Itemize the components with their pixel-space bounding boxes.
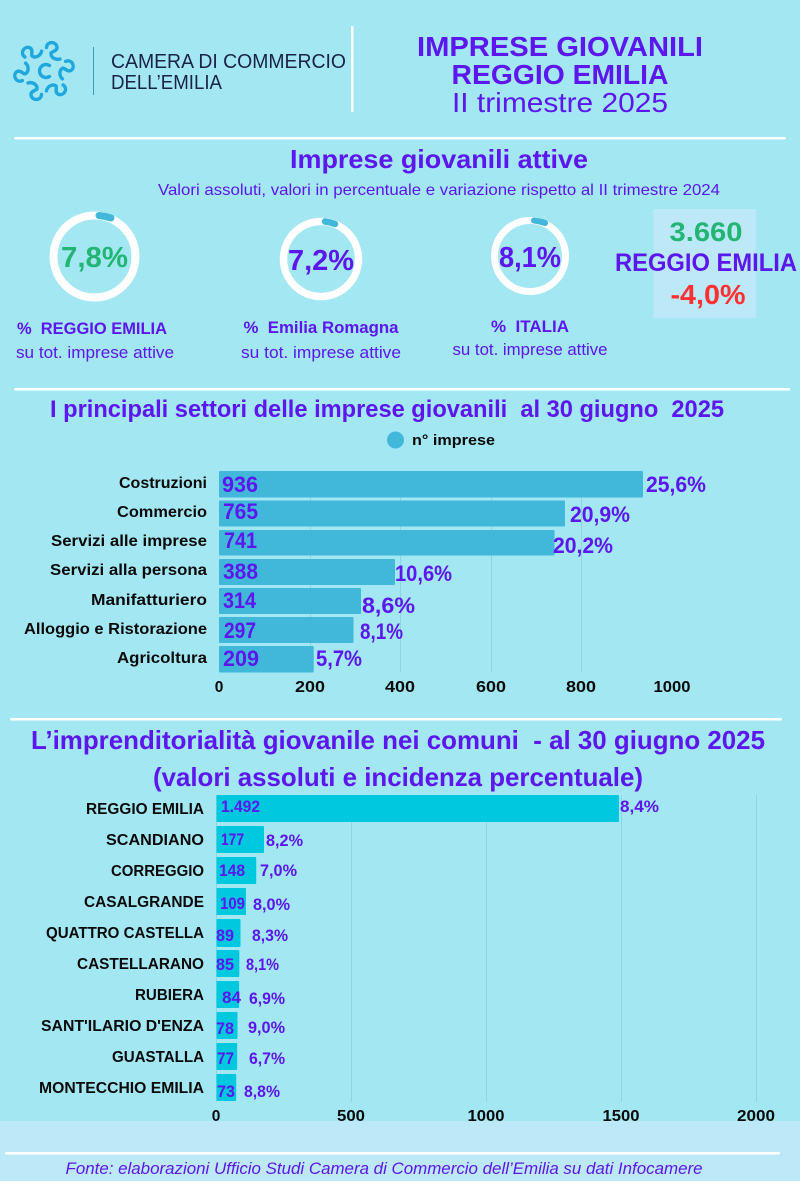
- percentages: 6,9%: [249, 989, 285, 1008]
- heading: imprenditorialità nei comuni: [31, 725, 765, 792]
- axis: 200: [295, 679, 325, 696]
- axis: [212, 1108, 775, 1125]
- heading: imprese giovanili attive: [158, 144, 720, 199]
- axis: 1000: [654, 679, 690, 696]
- callout: totale Reggio Emilia: [615, 209, 797, 318]
- callout: totale Reggio Emilia: -4,0%: [670, 279, 746, 310]
- values: 85: [216, 955, 234, 974]
- municipality labels: SANT'ILARIO D'ENZA: [41, 1018, 204, 1035]
- legend: n° imprese: [387, 432, 495, 449]
- title: REGGIO EMILIA: [452, 59, 668, 90]
- values: [216, 797, 260, 1101]
- municipality labels: RUBIERA: [135, 987, 204, 1004]
- percentages: 7,0%: [260, 861, 297, 880]
- heading: imprese giovanili attive: Valori assoluti, valori in percentuale e variazione rispetto al II trimestre 2024: [158, 182, 720, 199]
- axis: 2000: [737, 1108, 775, 1125]
- panel: kpi Emilia Romagna: su tot. imprese attive: [241, 344, 401, 362]
- axis: [215, 679, 690, 696]
- category labels: Servizi alla persona: [50, 562, 207, 579]
- municipality labels: QUATTRO CASTELLA: [46, 925, 204, 942]
- category labels: [24, 475, 207, 667]
- logo: Camera di Commercio dell'Emilia: CAMERA DI COMMERCIO: [111, 50, 346, 73]
- bar chart: comuni: [39, 795, 775, 1125]
- panel: kpi Reggio Emilia: 7,8%: [61, 242, 128, 274]
- values: 741: [224, 528, 257, 553]
- panel: kpi Emilia Romagna: [241, 222, 401, 362]
- values: 1.492: [221, 797, 260, 816]
- axis: 500: [337, 1108, 365, 1125]
- percentages: 20,9%: [570, 502, 630, 527]
- category labels: Commercio: [117, 504, 207, 521]
- municipality labels: GUASTALLA: [112, 1049, 204, 1066]
- panel: kpi Reggio Emilia: su tot. imprese attive: [16, 344, 174, 362]
- values: 109: [220, 894, 245, 913]
- values: 148: [219, 861, 245, 880]
- source note: Fonte: elaborazioni Ufficio Studi Camera di Commercio dell’Emilia su dati Infocamere: [66, 1159, 702, 1178]
- percentages: 8,3%: [252, 926, 288, 945]
- panel: kpi Italia: 8,1%: [499, 242, 561, 274]
- category labels: Costruzioni: [119, 475, 207, 492]
- percentages: 10,6%: [395, 561, 452, 586]
- percentages: [244, 797, 659, 1101]
- panel: kpi Italia: % ITALIA: [491, 317, 569, 336]
- municipality labels: CORREGGIO: [111, 863, 204, 880]
- municipality labels: SCANDIANO: [106, 832, 204, 849]
- percentages: [316, 472, 706, 671]
- category labels: Manifatturiero: [91, 592, 207, 609]
- percentages: 8,2%: [266, 831, 303, 850]
- category labels: Alloggio e Ristorazione: [24, 621, 207, 638]
- values: [222, 472, 259, 671]
- municipality labels: REGGIO EMILIA: [86, 801, 204, 818]
- title: II trimestre 2025: [452, 87, 668, 118]
- panel: kpi Italia: [452, 220, 608, 359]
- category labels: Agricoltura: [117, 650, 207, 667]
- axis: 1000: [468, 1108, 504, 1125]
- panel: kpi Emilia Romagna: % Emilia Romagna: [244, 318, 399, 337]
- logo: Camera di Commercio dell'Emilia: [11, 43, 346, 99]
- municipality labels: MONTECCHIO EMILIA: [39, 1080, 204, 1097]
- axis: 1500: [602, 1108, 640, 1125]
- values: 78: [216, 1019, 234, 1038]
- values: 209: [223, 646, 259, 671]
- percentages: 25,6%: [646, 472, 706, 497]
- legend: n° imprese: n° imprese: [412, 432, 495, 449]
- logo: Camera di Commercio dell'Emilia: DELL’EMILIA: [111, 71, 222, 94]
- percentages: 8,6%: [362, 593, 415, 618]
- percentages: 9,0%: [248, 1018, 285, 1037]
- axis: 0: [215, 679, 223, 696]
- percentages: 5,7%: [316, 646, 362, 671]
- axis: 800: [566, 679, 596, 696]
- municipality labels: CASALGRANDE: [84, 894, 204, 911]
- heading: imprenditorialità nei comuni: L’imprenditorialità giovanile nei comuni - al 30 giugno 2025: [31, 725, 765, 755]
- icon: logo rosette: [11, 43, 77, 99]
- values: 936: [222, 472, 258, 497]
- values: 89: [216, 926, 234, 945]
- percentages: 20,2%: [553, 533, 613, 558]
- heading: imprese giovanili attive: Imprese giovanili attive: [290, 144, 588, 174]
- percentages: 6,7%: [249, 1049, 285, 1068]
- values: 765: [223, 499, 258, 524]
- bars: [216, 795, 619, 1101]
- panel: kpi Italia: su tot. imprese attive: [452, 341, 608, 359]
- category labels: Servizi alle imprese: [51, 533, 207, 550]
- values: 314: [223, 588, 257, 613]
- values: 297: [224, 618, 256, 643]
- values: 177: [221, 830, 244, 849]
- values: 77: [217, 1049, 234, 1068]
- title: IMPRESE GIOVANILI: [417, 31, 703, 62]
- heading: imprenditorialità nei comuni: (valori assoluti e incidenza percentuale): [153, 762, 643, 792]
- percentages: 8,4%: [620, 797, 659, 816]
- panel: kpi Emilia Romagna: 7,2%: [288, 245, 354, 277]
- callout: totale Reggio Emilia: 3.660: [670, 217, 742, 247]
- values: 388: [223, 559, 258, 584]
- bar chart: settori: [24, 471, 706, 696]
- bars: [219, 471, 643, 672]
- heading: principali settori: I principali settori delle imprese giovanili al 30 giugno 2025: [50, 396, 724, 423]
- percentages: 8,1%: [246, 955, 279, 974]
- percentages: 8,0%: [253, 895, 290, 914]
- percentages: 8,1%: [360, 619, 403, 644]
- percentages: 8,8%: [244, 1082, 280, 1101]
- municipality labels: CASTELLARANO: [77, 956, 204, 973]
- axis: 0: [212, 1108, 220, 1125]
- values: 84: [222, 988, 242, 1007]
- axis: 600: [476, 679, 506, 696]
- panel: kpi Reggio Emilia: % REGGIO EMILIA: [17, 319, 167, 338]
- axis: 400: [385, 679, 415, 696]
- values: 73: [217, 1082, 235, 1101]
- panel: kpi Reggio Emilia: [16, 216, 174, 362]
- title: [417, 31, 703, 118]
- municipality labels: [39, 801, 204, 1097]
